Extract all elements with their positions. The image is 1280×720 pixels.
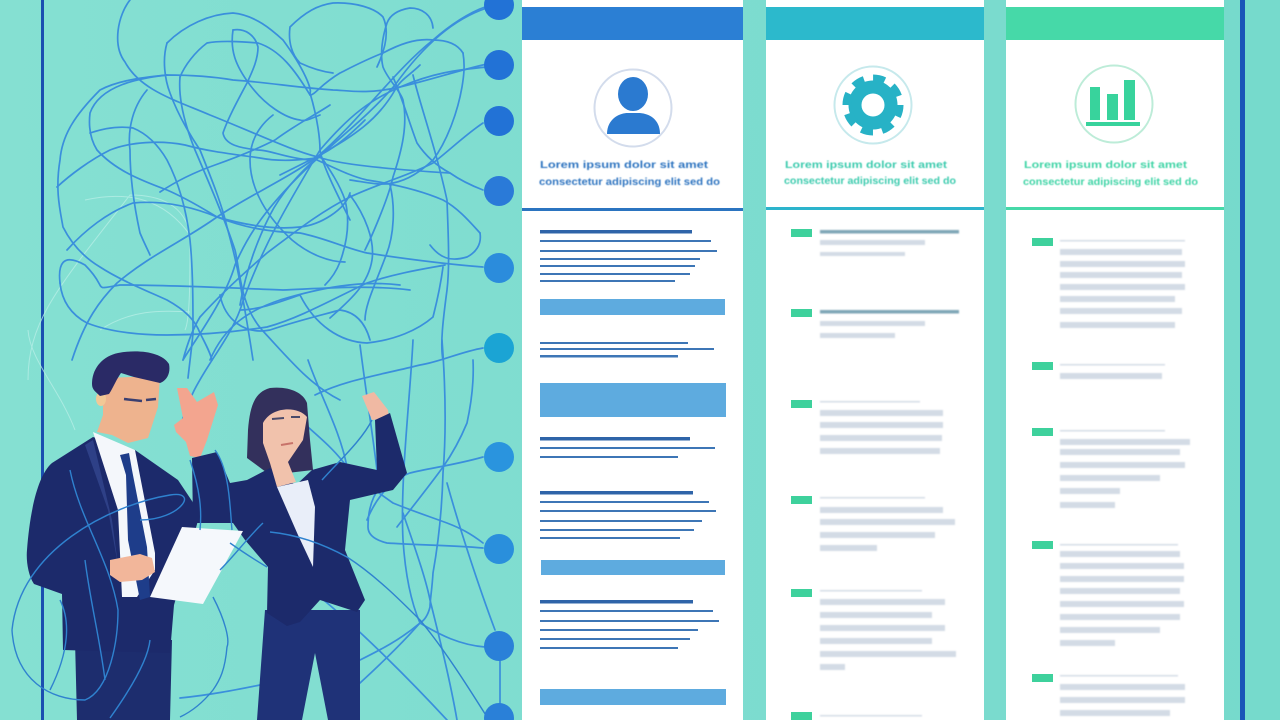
woman shirt [277, 480, 315, 567]
column 1 header bar [522, 7, 743, 40]
dot 6 [484, 333, 514, 363]
woman raised hand [362, 392, 389, 420]
man hair [92, 351, 169, 396]
panel: column 1 [522, 0, 743, 720]
column 2 heading: consectetur adipiscing elit sed do [784, 175, 956, 187]
icon: person [594, 70, 672, 146]
column 2 header bar [766, 7, 984, 40]
dot 2 [484, 50, 514, 80]
man lapel [85, 440, 118, 565]
man jacket [27, 437, 200, 653]
dot 1 [484, 0, 514, 20]
man holding hand [110, 554, 155, 582]
clipboard [150, 527, 243, 604]
dot 7 [484, 442, 514, 472]
column 2 divider [766, 207, 984, 210]
dot 4 [484, 176, 514, 206]
panel: column 3 [1006, 0, 1224, 720]
icon: bar chart [1076, 66, 1152, 142]
column 3 divider [1006, 207, 1224, 210]
faint white scribbles [28, 195, 190, 430]
dot 10 [484, 703, 514, 720]
panel: column 2 [766, 0, 984, 720]
tangled lines [57, 0, 500, 720]
dot 3 [484, 106, 514, 136]
man tie [120, 453, 150, 600]
man neck and face [97, 376, 160, 443]
left frame line [41, 0, 44, 720]
woman jacket [192, 413, 407, 626]
column 1 heading [539, 159, 720, 188]
man raised hand [174, 388, 218, 458]
man shirt [93, 432, 155, 597]
column 3 tags [1032, 238, 1053, 682]
dot 9 [484, 631, 514, 661]
man figure [27, 351, 218, 720]
column 1 divider [522, 208, 743, 211]
right frame line [1240, 0, 1245, 720]
column 1 body lines [540, 230, 719, 649]
column 2 tags [791, 229, 812, 720]
column 3 item lines [1060, 240, 1190, 716]
column 2 heading: Lorem ipsum dolor sit amet [785, 159, 948, 171]
man ear [96, 392, 106, 406]
woman eyes [272, 417, 300, 419]
woman hair [247, 388, 313, 475]
lines over the figures [12, 420, 487, 718]
man eyes [124, 399, 156, 401]
column 3 heading: Lorem ipsum dolor sit amet [1024, 159, 1188, 171]
column 1 blue blocks [540, 299, 726, 705]
node dots [484, 0, 514, 720]
man legs [75, 640, 172, 720]
woman figure [192, 388, 407, 720]
column 3 heading: consectetur adipiscing elit sed do [1023, 176, 1198, 188]
column 2 item lines [820, 230, 959, 716]
column 3 header bar [1006, 7, 1224, 40]
dot 5 [484, 253, 514, 283]
woman legs [257, 610, 360, 720]
column 3 heading [1023, 159, 1198, 188]
dot 8 [484, 534, 514, 564]
column 1 heading: Lorem ipsum dolor sit amet [540, 159, 709, 171]
woman face and neck [263, 409, 307, 487]
woman mouth [281, 443, 293, 445]
column 1 heading: consectetur adipiscing elit sed do [539, 176, 720, 188]
icon: gear [834, 66, 912, 144]
column 2 heading [784, 159, 956, 187]
